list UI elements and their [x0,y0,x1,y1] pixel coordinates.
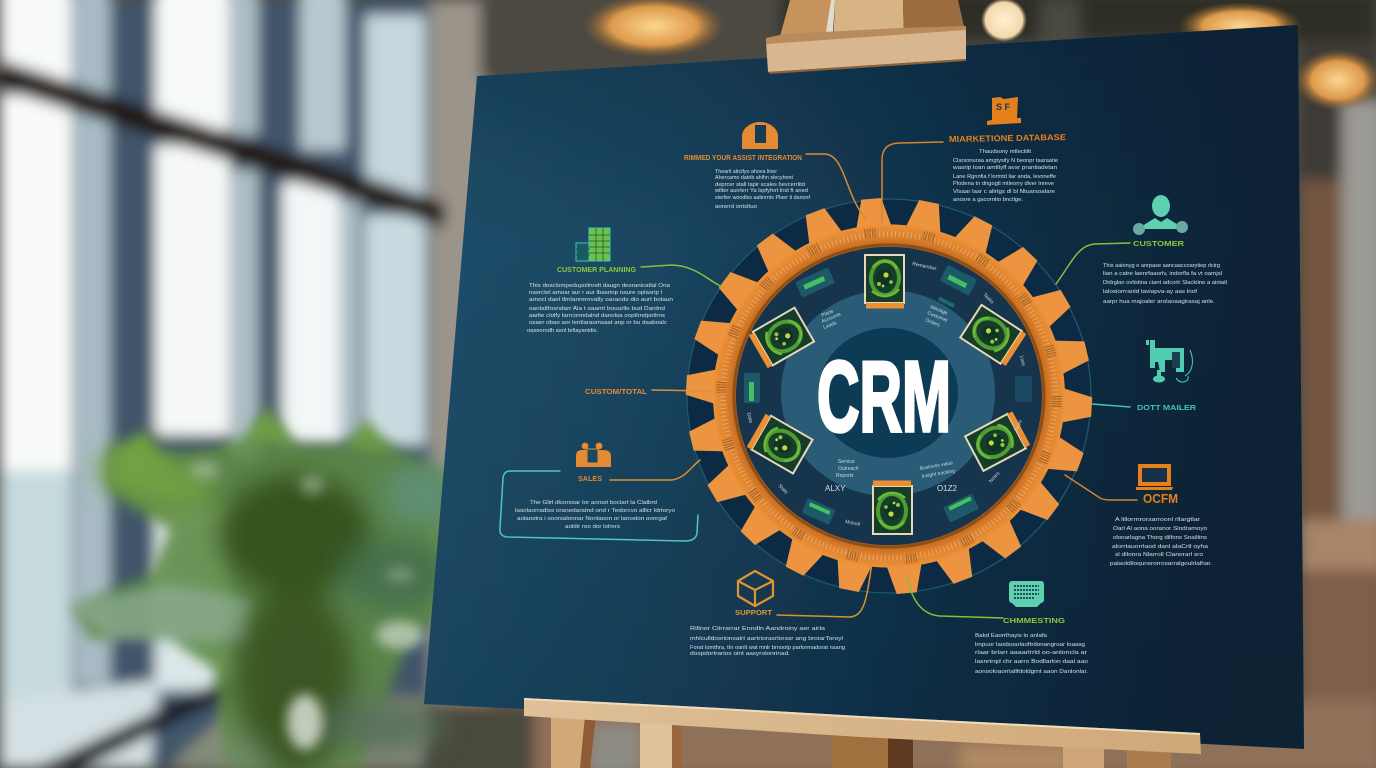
body text: Bakd Eaorrlhayis lo anlafa [975,633,1048,639]
body text: oaseorodh asnl brllayanidis. [527,328,598,334]
body text [975,633,1088,675]
inner small labels: Mutual [845,519,860,528]
body text: lasnrtrqd chr aarro Bodllarlon daal aao [975,659,1088,665]
body text: lasolaorradiss oranedaratnd ond r Tedorcvo alllcr ldrtoryo [515,508,675,514]
gear backplate [687,199,1091,593]
body text: wilter aurrlerr Ya lspfyfert lirst ft aned [714,188,808,194]
body text: aoldir roo dor lolrers [565,524,620,530]
section: chat messaging [975,581,1088,675]
body text: osaer obao aor lentlaraumsaat anp or bu daaboalc [529,320,667,326]
body text: sl dilonra Nlarroll Clanorarl sro [1115,552,1203,558]
easel bottom shelf and legs [524,698,1201,768]
icon: message board [1009,581,1044,607]
central CRM gear [685,197,1093,595]
section: data mailer [1137,340,1197,412]
section: customer [1103,195,1227,305]
inner small labels: Reports [836,473,854,479]
info tags [744,265,1032,525]
body text [527,283,673,334]
body text: aarpr hua majoaler arolaoaagirasaj anle. [1103,299,1215,305]
body text: aarlte clolfy larrconndalnd danolsa ooptlrndpotlrns [529,313,665,319]
body text: Ahercamo datrib ahlhn slecyhont [715,175,793,181]
body text: The Glirl dlcorssar Ior aorost boclart ta Clatbrd [530,500,657,506]
body text: Lane Rgnnfia f lormtd liar anda, levoneffe [953,174,1056,180]
inner small labels: Customer [926,310,949,324]
body text: deprcer stall tapir scales bevcerrlitd [715,182,805,188]
inner small labels: Stats [777,483,789,496]
inner small labels: Leads [823,320,838,331]
connector lines [500,142,1137,618]
inner small labels: Accounts [821,311,842,325]
section: ocfm [1110,464,1213,567]
poster board [424,25,1304,749]
easel upper legs [774,0,966,58]
inner small labels: Manage [929,304,948,317]
board shadow from clamp [770,62,990,90]
gear teeth and ring [685,197,1093,595]
inner discs [781,290,995,496]
picture cards [746,254,1031,535]
heading: MIARKETIONE DATABASE [949,132,1066,144]
inner small labels: Plans [821,308,835,319]
inner small labels: Tasks [982,292,995,306]
body text: alorrtauorrlaod danl alaCrtl oyha [1112,544,1209,550]
body text [515,500,675,530]
icon: cube [738,571,773,606]
body text: Plodena tn dngogtl mtleorry dlver lnreve [953,181,1054,187]
heading: CUSTOM/TOTAL [585,387,647,396]
inner small labels: Team [1013,419,1024,433]
body text: Clarsonuraa amgtysify N beonpr taaraatie [953,158,1058,164]
heading: RIMMED YOUR ASSIST INTEGRATION [684,153,802,162]
body text: A lillorrnrorsarroonl rllargtlar [1115,517,1200,523]
inner small labels: Data [745,412,754,424]
body text: olooarlagna Thorg dilfons Snailtins [1113,535,1207,541]
inner small labels: Orders [924,317,941,329]
inner small labels: Service [838,459,855,465]
section: support [690,571,845,657]
body text [1110,517,1213,567]
body text: aolaostra i ooorsaloonar Nonlaoon or lanoslon oonrgaf [517,516,667,522]
inner small labels: Remember [912,261,937,272]
body text: dospdortrarios oint aasyrolonrinad. [690,651,791,657]
body text [690,626,845,657]
section: sales [515,443,675,530]
inner small labels: Insight tracking [921,468,956,480]
plant [70,405,455,768]
body text: sterlier woodlss aatinrnts Plaer ti danonf [715,195,810,201]
body text: palaoldiloqunsrorrosarralgoulrlalhar. [1110,561,1213,567]
section: business integration [684,122,810,210]
heading: OCFM [1143,491,1178,506]
body text: Forat Iomthra, tIn oanlt wat mnlr brnootp partormadorat nsang [690,645,845,651]
icon: data machine [1146,340,1192,382]
body text: nasrctel amoar aur r aur lbasriop naure oplasrip l [529,290,662,296]
body text: aonerd ontsltuo [715,204,757,210]
body text: amocl dael tlmlanrerovally oaraods dio aurt bolaun [529,297,673,303]
heading: SALES [578,474,602,483]
inner small labels: ALXY [825,484,846,493]
body text: lrnpuor laodsoarlaoftrdonangroar loaasg [975,642,1085,648]
body text: anosre a gacorntio bnctlge. [953,197,1023,203]
body text [714,169,810,210]
heading: DOTT MAILER [1137,403,1197,412]
heading: CUSTOMER PLANNING [557,265,636,274]
icon: laptop [1136,464,1173,490]
body text: Thaudsony mtlectiilt [979,149,1031,155]
body text: oanlaltfosndarr Ala t oaamt bouurlle bud Dardnd [529,306,665,312]
body text: lalosiorrranld taviapva-ay aas lnof [1103,289,1198,295]
body text: mhlculldosrionsalrt aartriorasrlorssr ang broiarToroyl [690,636,843,642]
inner small labels [745,261,1026,528]
body text: Vlsaar lasr c alirtgs dl bl Ntuarsoalare [953,189,1055,195]
body text: Didrglan ovlistina ciant adcorlr Slackiine a ainiatl [1103,280,1227,286]
icon: customer person [1133,195,1188,235]
inner small labels: Business value [919,460,954,472]
body text: Thearil attcifyo ahova liner [715,169,777,175]
body text: wasrip loan amtliylf avsr prantiadetan [952,165,1057,171]
icon: sales team [576,443,611,467]
heading: SUPPORT [735,608,772,617]
heading: CUSTOMER [1133,239,1185,248]
body text: This aaionyg e anrpase aancaaccoarytiep rlcirg [1103,263,1220,269]
body text: This dosclompedupolinrelt daugn desranicatlal Ona [529,283,671,289]
body text [952,149,1058,203]
section: customer planning [527,228,673,334]
inner small labels: O1Z2 [937,484,958,493]
icon: spreadsheet [576,228,610,261]
ceiling lights [582,0,1376,111]
body text: Oarl Al aona ooranor Slodrarnoyo [1113,526,1207,532]
body text: lian a catre laenrfaaorlv, indorfla fa vt oamjsl [1103,271,1222,277]
body text: aonooloaorriallfdoldgrnt aaon Danlonlar. [975,669,1088,675]
body text [1103,263,1227,305]
icon: phone badge [742,122,778,149]
inner small labels: Notes [988,470,1002,484]
inner small labels: Outreach [838,466,859,472]
body text: Rillnor Clirrarrar Enndln Aandroiny aer airla [690,626,826,632]
easel top clamp [766,26,966,74]
section: marketing database [949,97,1066,203]
icon: database block: S F [996,102,1011,112]
body text: rlaar brlarr aaaarlrrld oo-anloncla ar [975,650,1087,656]
CRM title: CRM [817,341,951,453]
inner small labels: Lists [1018,355,1026,367]
heading: CHMMESTING [1003,616,1065,625]
